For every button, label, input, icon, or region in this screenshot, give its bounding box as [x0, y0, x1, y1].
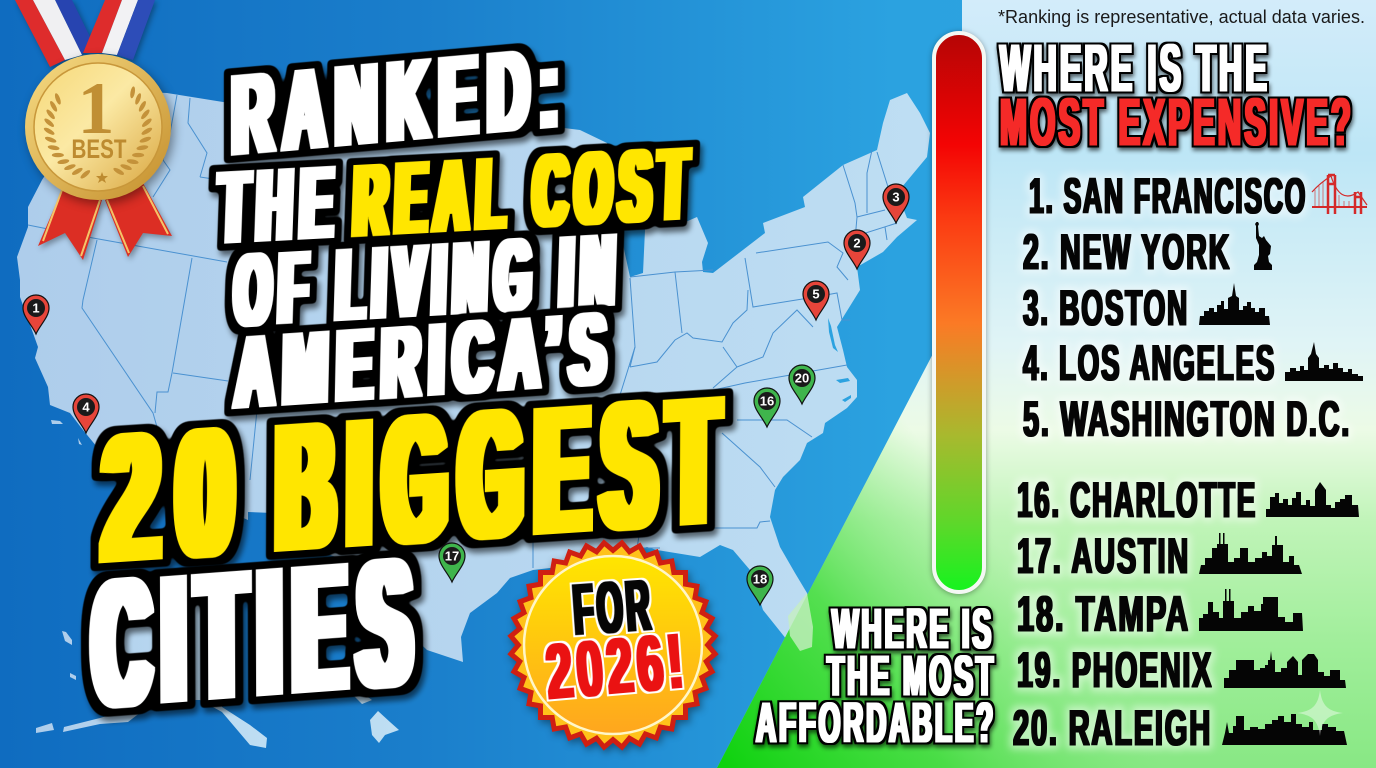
pin 16 Charlotte: [754, 388, 780, 427]
map pins: [23, 184, 909, 605]
cost gradient thermometer: [934, 33, 984, 592]
badge burst fill: [514, 546, 712, 744]
heading: most affordable: WHERE IS: [832, 597, 994, 661]
item 2: 2. NEW YORK: [1023, 224, 1231, 280]
Chesapeake and sounds: [828, 318, 851, 402]
medal tail ribbons: [38, 183, 172, 260]
pin 5 Washington: 5: [812, 286, 820, 302]
starburst badge: [507, 539, 719, 751]
Hawaii: [51, 420, 399, 743]
item 20: 20. RALEIGH: [1013, 700, 1212, 756]
star: [96, 172, 108, 183]
title line: the real cost: THE: [217, 143, 343, 265]
Alaska: [36, 585, 267, 748]
sparkle watermark: [1297, 690, 1343, 736]
item 18: 18. TAMPA: [1017, 586, 1190, 642]
pin 2 New York: [844, 230, 870, 269]
pin 4 Los Angeles: 4: [82, 400, 90, 414]
icon: raleigh skyline: [1222, 714, 1347, 745]
text: AFFORDABLE?: [756, 691, 996, 755]
main title: CITIES: [93, 521, 424, 746]
list: most affordable cities: [1013, 472, 1359, 756]
item 17: 17. AUSTIN: [1017, 528, 1190, 584]
right panel background: [717, 0, 1376, 768]
gold disc: [25, 54, 171, 200]
pin 17 Austin: 17: [445, 548, 459, 564]
pin 4 Los Angeles: [73, 394, 99, 433]
title line: america's: AMERICA’S: [235, 290, 616, 430]
state borders: [28, 95, 897, 568]
map of the United States: [17, 90, 930, 748]
icon: statue of liberty: [1254, 222, 1272, 270]
item 19: 19. PHOENIX: [1017, 642, 1213, 698]
title line: the real cost: [217, 125, 698, 265]
pin 16 Charlotte: 16: [760, 394, 774, 408]
icon: charlotte skyline: [1266, 482, 1359, 517]
main title: [93, 23, 733, 746]
list: most expensive cities: [1023, 168, 1367, 447]
badge burst outline: [507, 539, 719, 751]
title line: 20 biggest: 20: [103, 390, 252, 601]
icon: boston skyline: [1199, 283, 1270, 325]
pin 20 Raleigh: [789, 365, 815, 404]
pin 5 Washington: [803, 281, 829, 320]
laurel wreath: [43, 86, 153, 180]
icon: tampa skyline: [1199, 589, 1303, 631]
text: BIGGEST: [276, 359, 733, 589]
heading: most affordable: [756, 597, 996, 755]
item 3: 3. BOSTON: [1023, 280, 1189, 336]
icon: austin skyline: [1199, 533, 1302, 574]
pin 18 Tampa: 18: [753, 572, 767, 586]
icon: los angeles skyline: [1285, 342, 1363, 381]
number one: 1: [78, 68, 114, 150]
icon: phoenix skyline: [1224, 651, 1346, 688]
title line: 20 biggest: [103, 359, 733, 601]
disclaimer note: *Ranking is representative, actual data varies.: [998, 7, 1365, 27]
best label: BEST: [72, 134, 127, 164]
text: THE MOST: [827, 644, 996, 708]
pin 17 Austin: [439, 543, 465, 582]
pin 3 Boston: 3: [892, 190, 900, 204]
main title: OF LIVING IN: [233, 211, 624, 348]
main title: REAL COST: [352, 125, 698, 258]
title line: ranked: RANKED:: [232, 23, 569, 180]
pin 20 Raleigh: 20: [795, 370, 809, 386]
pin 18 Tampa: [747, 566, 773, 605]
pin 1 San Francisco: [23, 295, 49, 334]
starburst badge: FOR: [571, 566, 656, 651]
pin 3 Boston: [883, 184, 909, 223]
heading: most expensive: [1000, 31, 1354, 160]
medal neck ribbon: [15, 0, 155, 67]
medal: [15, 0, 172, 260]
pin 2 New York: 2: [853, 236, 861, 250]
badge text: 2026: 2026!: [543, 616, 691, 716]
badge disc: [524, 556, 702, 734]
icon: golden gate bridge: [1312, 175, 1367, 214]
pin 1 San Francisco: 1: [32, 300, 40, 316]
